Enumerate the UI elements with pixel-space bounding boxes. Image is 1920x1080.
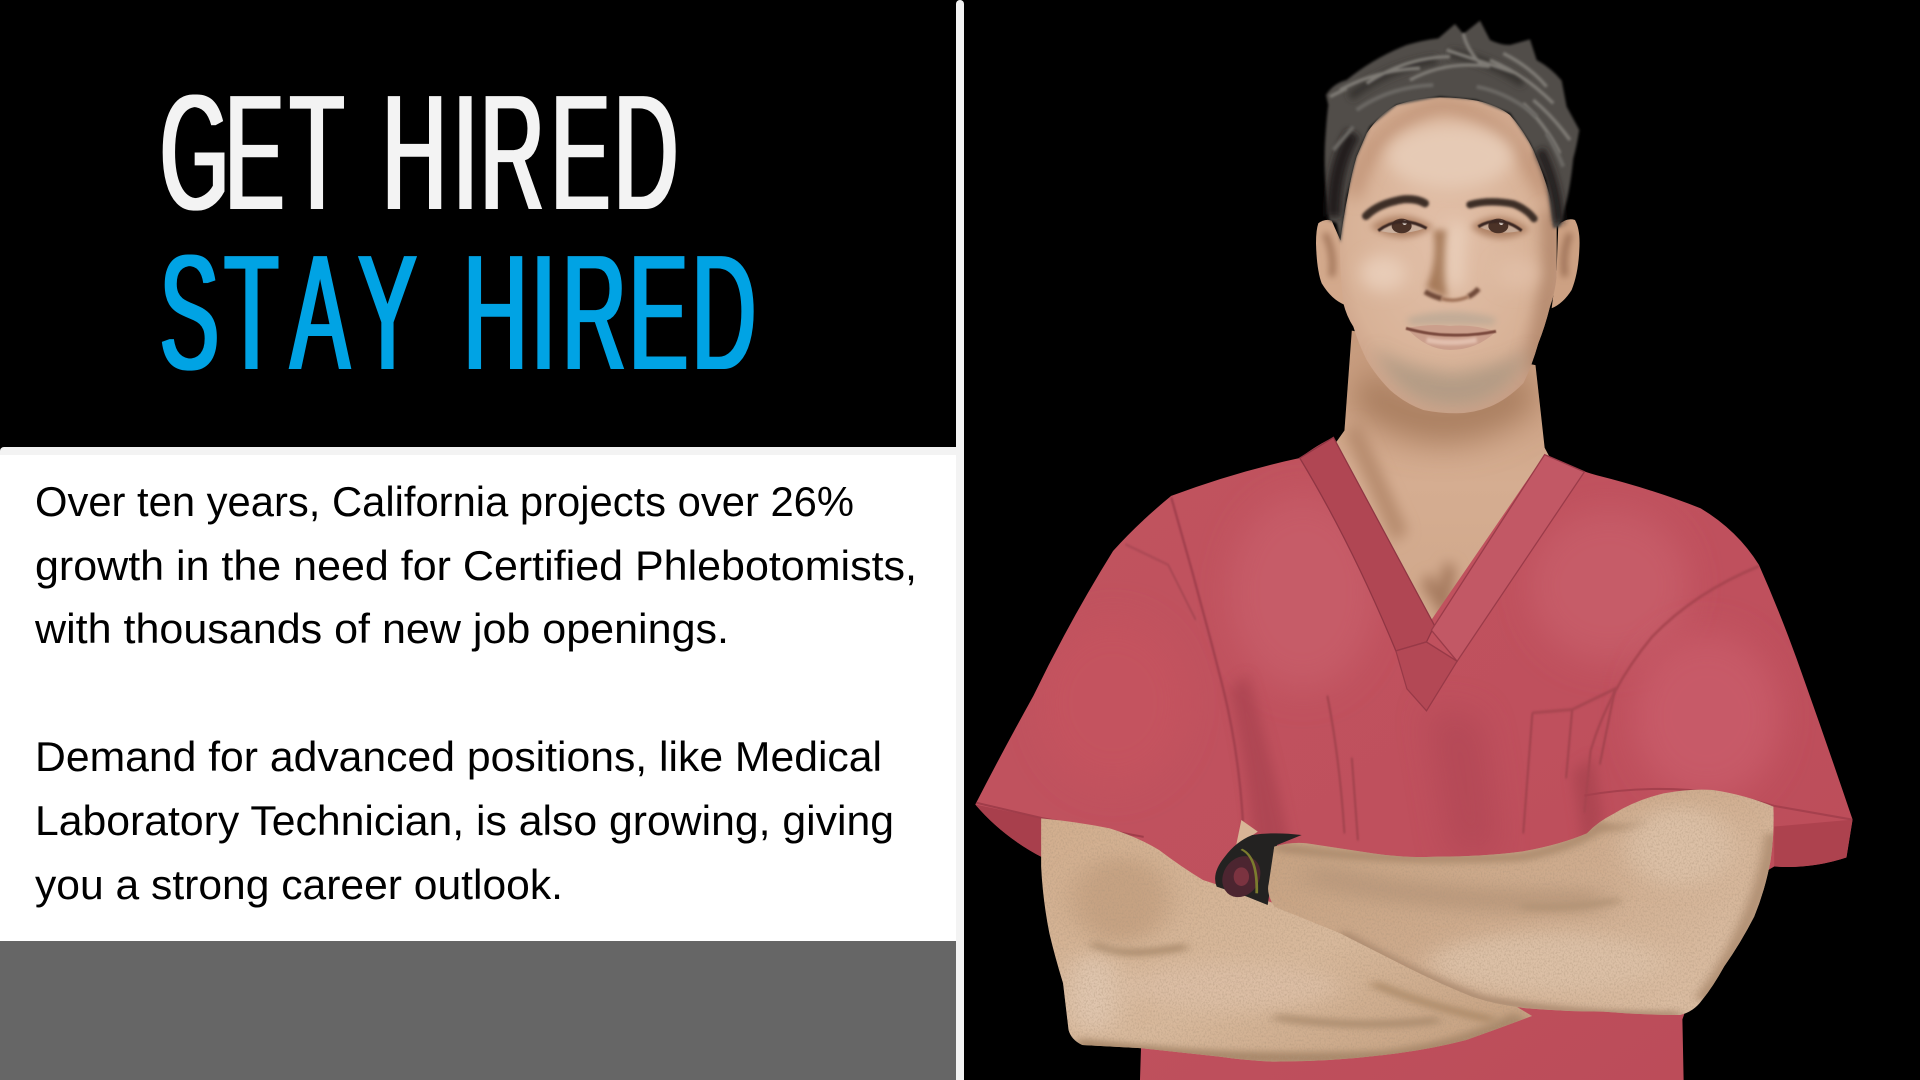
text block: job growth paragraphs [34,478,917,908]
mouth [1406,325,1496,350]
nose [1425,223,1479,300]
hair [1325,21,1579,243]
neck [1336,330,1549,620]
text block: job growth paragraphs: Laboratory Technician, is also growing, giving [35,797,894,844]
text block: job growth paragraphs: with thousands of new job openings. [34,605,729,652]
text block: job growth paragraphs: Demand for advanced positions, like Medical [35,733,882,780]
watch [1215,833,1302,905]
scrub shirt [975,437,1853,1080]
left eye [1378,219,1427,233]
ears [1316,219,1580,308]
lower forearm [1041,818,1532,1062]
eyebrows [1366,199,1534,219]
collar [1300,437,1434,651]
panel: white text card [0,447,956,941]
panel: black title background [0,0,956,447]
head group: ears, face, hair and features [1316,21,1580,413]
stubble [1373,347,1533,407]
text block: job growth paragraphs: growth in the need for Certified Phlebotomists, [35,542,917,589]
upper forearm [1263,787,1779,1020]
title: Get Hired Stay Hired: STAY HIRED [160,221,756,404]
torso group: neck and scrub shirt [975,331,1853,1080]
eye sockets [1370,216,1530,238]
text block: job growth paragraphs: you a strong career outlook. [35,861,563,908]
divider: vertical white line [956,0,964,1080]
photo: man in red scrubs with crossed arms [975,20,1853,1080]
panel: gray footer band [0,941,956,1080]
arms group: crossed forearms and watch [1033,787,1779,1067]
text block: job growth paragraphs: Over ten years, California projects over 26% [35,478,854,525]
title: Get Hired Stay Hired: GET HIRED [160,61,678,244]
title: Get Hired Stay Hired [160,61,756,404]
right eye [1478,219,1522,233]
sleeve inner hems [976,804,1041,857]
face [1340,97,1557,413]
sliver of hand skin [1236,820,1258,847]
